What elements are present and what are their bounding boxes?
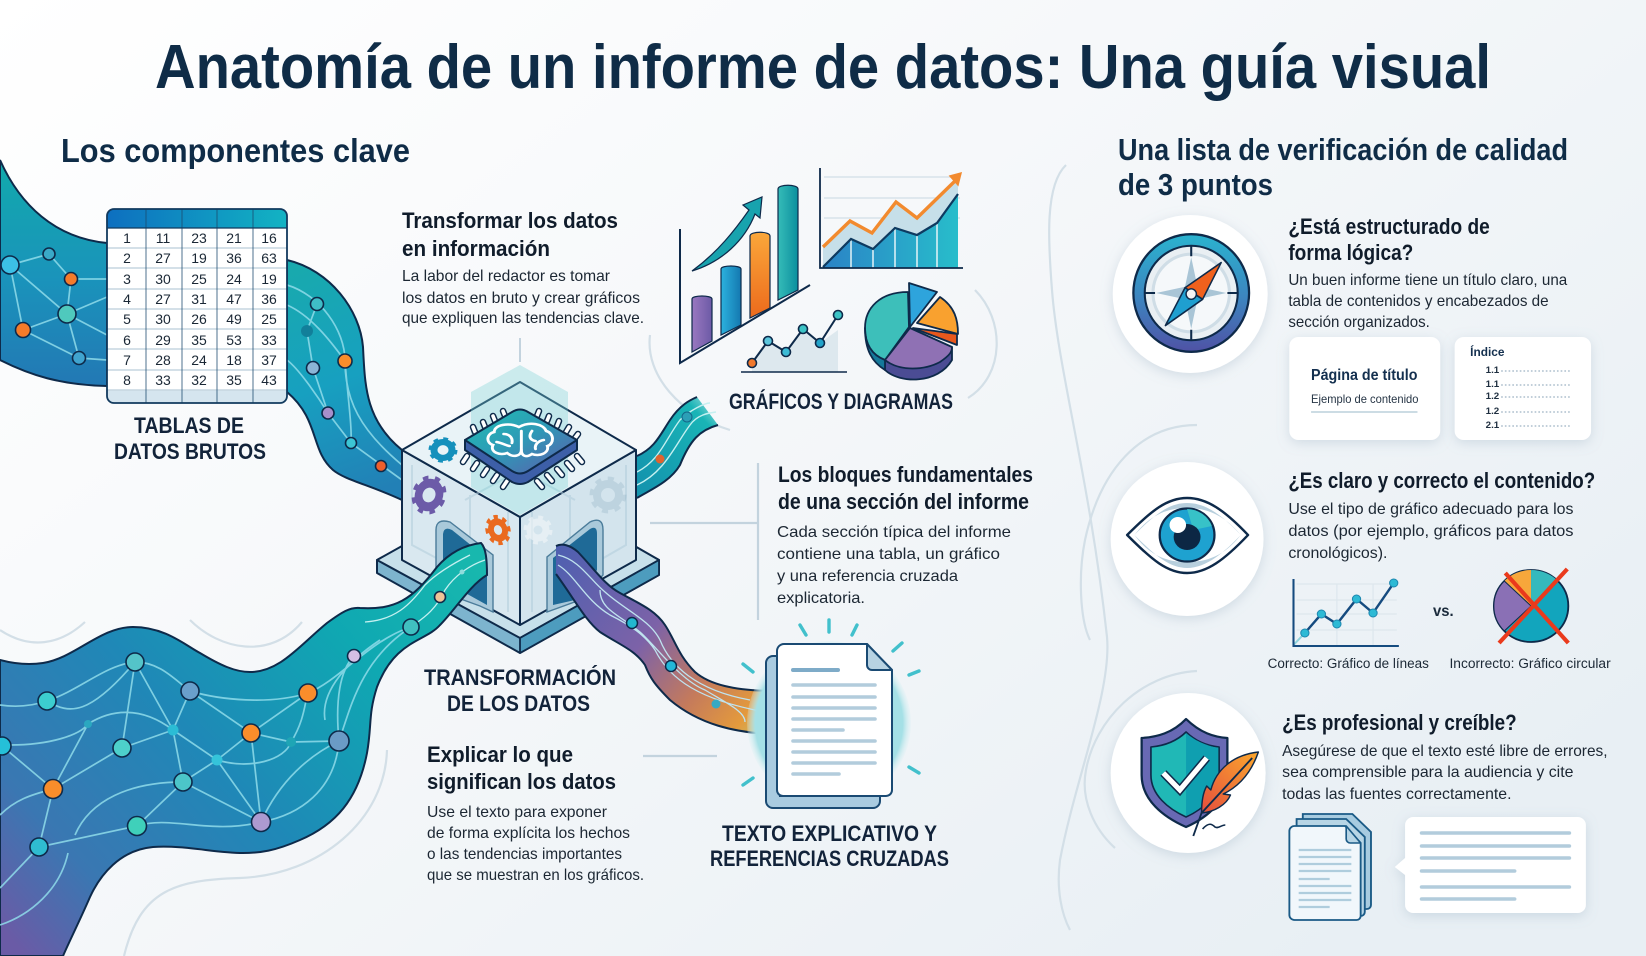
label: tablas de datos brutos: DATOS BRUTOS (114, 439, 266, 464)
heading: los componentes clave: Los componentes clave (61, 132, 410, 169)
label: texto explicativo y referencias cruzadas: REFERENCIAS CRUZADAS (710, 846, 949, 871)
data table: 36 (226, 250, 242, 266)
data ribbon: purple to document (556, 545, 768, 734)
data table: 36 (261, 291, 277, 307)
card: página de título: Ejemplo de contenido (1311, 393, 1419, 406)
data table: 49 (226, 311, 242, 327)
data table: 8 (123, 372, 131, 388)
data table: 53 (226, 332, 242, 348)
data table: 63 (261, 250, 277, 266)
data table: 24 (226, 271, 242, 287)
text block: datos (por ejemplo, gráficos para datos (1288, 522, 1573, 540)
label: transformación de los datos (424, 665, 616, 716)
card: índice: 2.1 (1486, 420, 1500, 431)
data table: 18 (226, 352, 242, 368)
pie chart: incorrecto (1494, 569, 1568, 643)
base plate (377, 480, 659, 653)
data table: 7 (123, 352, 131, 368)
text block (1282, 709, 1608, 803)
card: índice: 1.1 (1486, 365, 1500, 376)
text block: Un buen informe tiene un título claro, una (1288, 271, 1568, 289)
label: transformación de los datos: DE LOS DATOS (447, 691, 590, 716)
card: índice: 1.2 (1486, 391, 1499, 402)
text block: Asegúrese de que el texto esté libre de errores, (1282, 742, 1608, 760)
icon: eye (1111, 462, 1264, 616)
text block: explicar lo que significan los datos: o las tendencias importantes (427, 846, 622, 863)
data ribbon: to charts (637, 397, 718, 498)
card: índice: Índice (1470, 346, 1505, 359)
label: tablas de datos brutos: TABLAS DE (134, 413, 244, 438)
data ribbon: raw data stream (0, 160, 402, 500)
data ribbon: lower network stream (0, 543, 487, 956)
card: página de título (1289, 337, 1440, 440)
text block: bloques fundamentales: de una sección del informe (778, 489, 1029, 514)
text block: bloques fundamentales: contiene una tabla, un gráfico (777, 546, 1000, 563)
captions: Correcto: Gráfico de líneas (1268, 656, 1429, 672)
text block: transformar los datos: en información (402, 236, 550, 261)
icon: glowing document (743, 620, 919, 808)
label: tablas de datos brutos (114, 413, 266, 464)
panel: item 3 credibilidad (1111, 693, 1608, 920)
data table: 4 (123, 291, 131, 307)
data table: 1 (123, 230, 131, 246)
cube faces (402, 382, 636, 625)
label: texto explicativo y referencias cruzadas: TEXTO EXPLICATIVO Y (722, 821, 937, 846)
chip with brain (463, 410, 582, 487)
data table: 43 (261, 372, 277, 388)
data table: 35 (226, 372, 242, 388)
data table: 24 (191, 352, 207, 368)
gears (410, 439, 624, 546)
text block: cronológicos). (1288, 544, 1388, 562)
connector: explicar (643, 755, 717, 757)
label: gráficos y diagramas: GRÁFICOS Y DIAGRAMAS (729, 389, 953, 414)
title: Anatomía de un informe de datos: Una guía visual (155, 33, 1491, 102)
data table: 47 (226, 291, 242, 307)
text block: bloques fundamentales: y una referencia cruzada (777, 568, 958, 585)
text block: explicar lo que significan los datos: Explicar lo que (427, 742, 573, 767)
text block: explicar lo que significan los datos: Use el texto para exponer (427, 804, 608, 821)
vs label: vs. (1433, 603, 1454, 620)
text block: explicar lo que significan los datos: que se muestran en los gráficos. (427, 867, 644, 884)
data table (107, 209, 287, 403)
data table: 16 (261, 230, 277, 246)
text block: transformar los datos: La labor del redactor es tomar (402, 268, 611, 285)
text block: transformar los datos: que expliquen las tendencias clave. (402, 310, 644, 327)
checklist column (1111, 213, 1611, 920)
data table: 28 (155, 352, 171, 368)
panel: item 1 estructura (1113, 213, 1591, 440)
data table: 25 (261, 311, 277, 327)
data table: 27 (155, 250, 171, 266)
small line chart (741, 310, 847, 372)
data table: 35 (191, 332, 207, 348)
text block: ¿Es profesional y creíble? (1282, 709, 1517, 735)
inner ghost structure (412, 465, 626, 612)
data table: 5 (123, 311, 131, 327)
text block: bloques fundamentales: Cada sección típica del informe (777, 524, 1011, 541)
text block: bloques fundamentales: explicatoria. (777, 590, 865, 607)
text block: ¿Está estructurado de (1288, 213, 1490, 239)
data table: 31 (191, 291, 207, 307)
text block: Use el tipo de gráfico adecuado para los (1288, 500, 1573, 518)
data table: 25 (191, 271, 207, 287)
data table: 32 (191, 372, 207, 388)
captions (1268, 656, 1611, 672)
text block: explicar lo que significan los datos: significan los datos (427, 769, 616, 794)
bar chart with arrow (680, 185, 810, 363)
text block (1288, 213, 1568, 331)
data table: 11 (156, 230, 170, 246)
text block: transformar los datos: los datos en bruto y crear gráficos (402, 290, 640, 307)
data table: 30 (155, 271, 171, 287)
captions: Incorrecto: Gráfico circular (1449, 656, 1611, 672)
heading: lista de verificación: de 3 puntos (1118, 167, 1273, 202)
text block: forma lógica? (1288, 239, 1413, 265)
icon: compass (1113, 215, 1268, 373)
heading: lista de verificación: Una lista de verificación de calidad (1118, 132, 1568, 167)
data table: 6 (123, 332, 131, 348)
connector: bloques (650, 463, 758, 620)
data table: 33 (155, 372, 171, 388)
area chart (820, 168, 963, 268)
label: transformación de los datos: TRANSFORMACIÓN (424, 665, 616, 690)
text block: sea comprensible para la audiencia y cite (1282, 763, 1573, 781)
icon: shield and feather (1111, 693, 1266, 853)
text block: transformar los datos: Transformar los datos (402, 208, 618, 233)
data table: 26 (191, 311, 207, 327)
text block: explicar lo que significan los datos (427, 742, 644, 884)
data table: 27 (155, 291, 171, 307)
data table: 23 (191, 230, 207, 246)
callout bubble (1395, 817, 1586, 913)
hexagon glow (471, 365, 568, 515)
processing cube (377, 365, 659, 653)
line chart: correcto (1293, 579, 1399, 646)
label: texto explicativo y referencias cruzadas (710, 821, 949, 871)
card: índice: 1.1 (1486, 379, 1500, 390)
text block: explicar lo que significan los datos: de forma explícita los hechos (427, 825, 630, 842)
card: página de título: Página de título (1311, 367, 1417, 384)
card: índice (1455, 337, 1591, 440)
text block: tabla de contenidos y encabezados de (1288, 292, 1549, 310)
network nodes: lower ribbon (0, 570, 464, 856)
data table: 37 (261, 352, 277, 368)
text block (1288, 467, 1595, 562)
data table: 19 (261, 271, 277, 287)
connector (519, 338, 521, 362)
heading: lista de verificación (1118, 132, 1568, 202)
icon: stacked documents (1289, 814, 1371, 920)
data table: 3 (123, 271, 131, 287)
3D pie chart (865, 283, 958, 379)
data table: 19 (191, 250, 207, 266)
icon: brain (488, 424, 552, 456)
data table: 33 (261, 332, 277, 348)
text block: bloques fundamentales: Los bloques fundamentales (778, 462, 1033, 487)
data table: 2 (123, 250, 131, 266)
arches (436, 520, 603, 612)
text block: sección organizados. (1288, 313, 1430, 331)
data table: 30 (155, 311, 171, 327)
text block: todas las fuentes correctamente. (1282, 785, 1511, 803)
text block: bloques fundamentales (777, 462, 1033, 607)
data table: 29 (155, 332, 171, 348)
network nodes: upper ribbon (1, 248, 386, 472)
panel: item 2 claridad (1111, 462, 1611, 672)
data table: 21 (226, 230, 242, 246)
card: índice: 1.2 (1486, 406, 1499, 417)
text block: transformar los datos (402, 208, 644, 327)
